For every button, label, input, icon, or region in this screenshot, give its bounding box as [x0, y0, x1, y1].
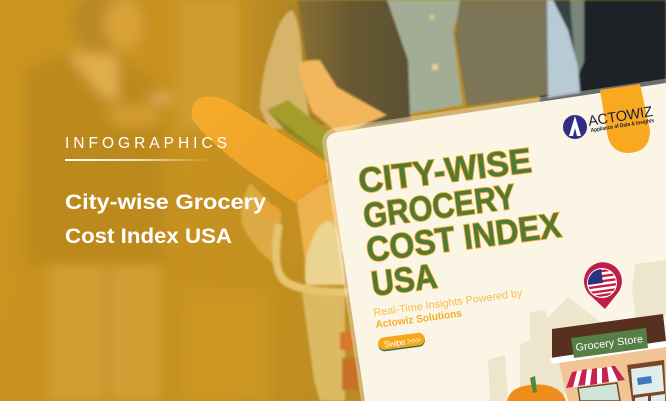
grocery store — [550, 314, 666, 401]
door with open sign — [627, 360, 666, 401]
card title: CITY-WISE — [356, 141, 534, 201]
grocery basket with hand and paper bag — [241, 60, 387, 401]
card title: COST INDEX — [364, 206, 564, 270]
awning — [566, 366, 625, 388]
logo: Appliance of Data & Insights — [590, 118, 655, 134]
card title: GROCERY — [361, 177, 518, 236]
location pin with US flag — [584, 262, 622, 309]
card title — [356, 141, 564, 304]
left title: City-wise Grocery — [65, 190, 266, 214]
store sign: Grocery Store — [575, 333, 644, 354]
left heading label: INFOGRAPHICS — [65, 135, 227, 152]
background photo: man in vest — [240, 0, 666, 130]
faded background buildings — [488, 260, 666, 401]
logo: ACTOWIZ — [587, 104, 654, 130]
left title — [65, 190, 266, 248]
tilted card — [322, 78, 666, 401]
swipe button — [377, 332, 426, 352]
swipe button: Swipe >>> — [384, 335, 422, 349]
store window — [578, 383, 620, 401]
logo — [563, 104, 655, 139]
card title: USA — [369, 257, 439, 304]
card subtitle: Real-Time Insights Powered by — [373, 287, 524, 319]
card subtitle — [373, 287, 524, 331]
card subtitle: Actowiz Solutions — [375, 308, 463, 331]
pumpkin — [507, 376, 566, 401]
left title: Cost Index USA — [65, 224, 232, 248]
baguette — [192, 97, 328, 203]
logo tab: orange capsule — [600, 84, 650, 153]
